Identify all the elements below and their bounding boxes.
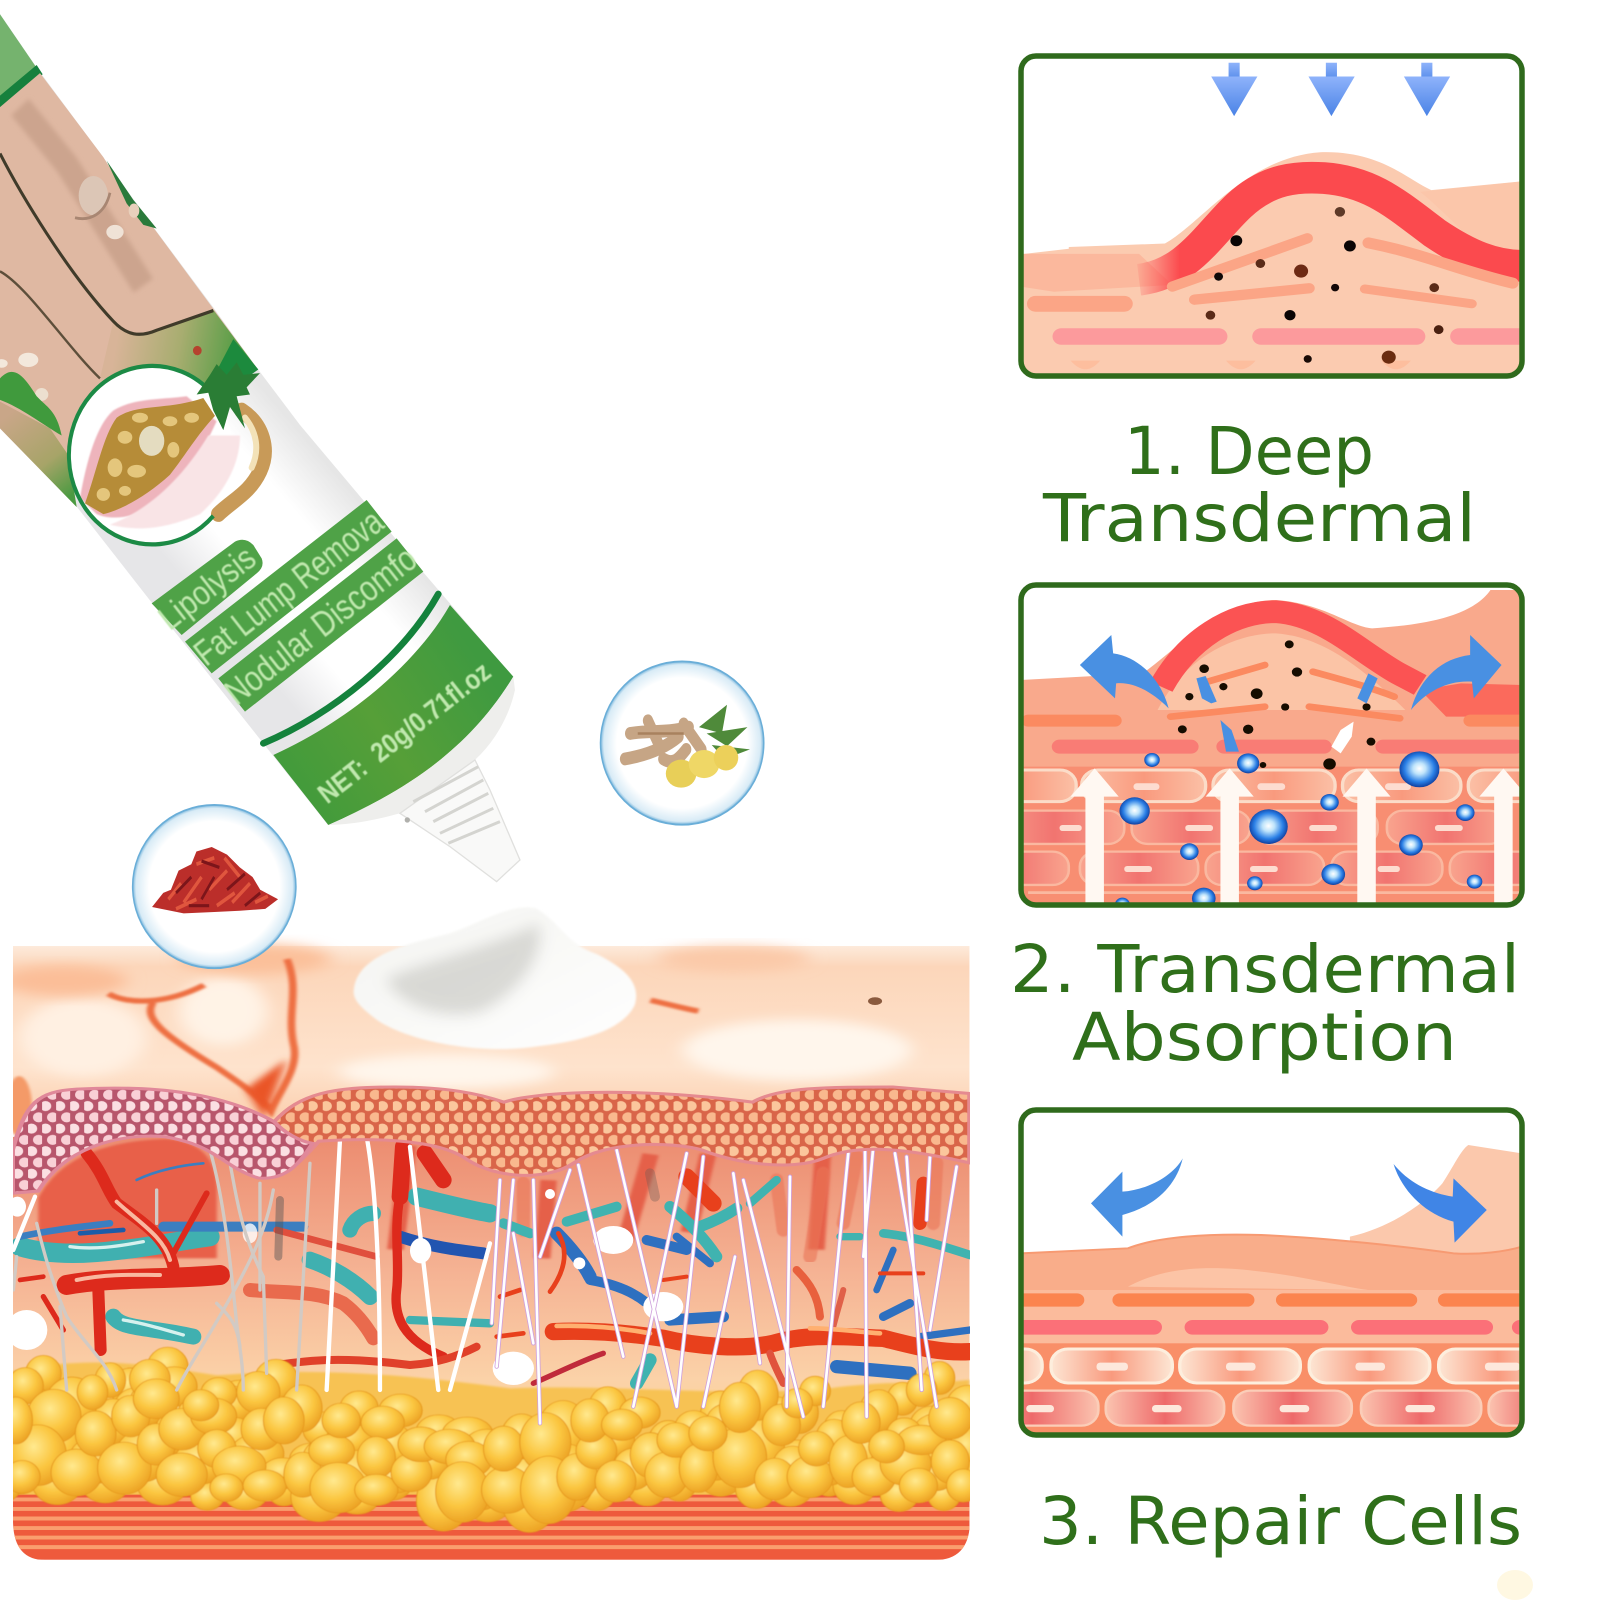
fat layer — [0, 1347, 998, 1560]
ingredient circle — [69, 362, 265, 544]
herb leaves — [197, 362, 260, 430]
fat cells — [0, 1347, 998, 1532]
fibers right — [492, 1147, 957, 1423]
caption 1 — [1042, 413, 1476, 557]
pink bars — [1017, 1305, 1527, 1349]
dermis background — [13, 1136, 970, 1392]
blue absorption spheres — [1115, 751, 1482, 911]
pink bars — [1052, 328, 1520, 345]
white deposits — [493, 1189, 683, 1385]
nozzle — [400, 760, 520, 882]
label: Lipolysis: Lipolysis — [151, 539, 263, 638]
orange bars — [1035, 238, 1513, 304]
cream blob — [354, 907, 636, 1049]
caption line: 1. Deep: 1. Deep — [1124, 413, 1374, 490]
root mass — [85, 398, 215, 514]
fibers left — [13, 1137, 490, 1390]
label: net weight: NET: 20g/0.71fl.oz — [312, 656, 496, 809]
saffron pile — [152, 847, 278, 913]
blue arrow right — [1394, 1164, 1487, 1243]
ginger — [625, 705, 750, 788]
impurity dots — [1206, 207, 1443, 364]
label artwork top — [0, 14, 265, 544]
band: Nodular — [218, 538, 423, 712]
blood vessels left — [20, 1147, 490, 1365]
band: Lipolysis — [152, 540, 263, 635]
faint corner smudge — [1497, 1570, 1533, 1600]
label: Fat Lump Remova: Fat Lump Remova — [186, 500, 391, 673]
skin base — [1024, 590, 1520, 767]
impurity dots — [1178, 640, 1375, 770]
cell rows — [943, 1349, 1585, 1426]
panel: skin cross-section — [0, 944, 998, 1560]
muscle stripes — [13, 1499, 969, 1547]
muscle area — [1021, 767, 1522, 905]
skin bars — [1028, 665, 1520, 721]
green stripe — [263, 594, 438, 743]
label: Nodular Discomfo: Nodular Discomfo — [216, 538, 424, 713]
skin illustration — [0, 73, 258, 507]
light green corner — [0, 14, 37, 104]
panel 2: transdermal absorption — [1024, 590, 1520, 902]
nuclei — [1060, 783, 1463, 872]
blue arrows down — [1211, 63, 1450, 116]
tube label bands — [152, 500, 520, 882]
epidermis cell band — [13, 1087, 969, 1193]
tube body — [0, 14, 513, 825]
band: Fat Lump — [185, 500, 392, 673]
raised skin right — [1350, 1145, 1522, 1257]
cell rows — [1024, 768, 1520, 894]
white arrows up — [1071, 768, 1527, 905]
panel 3: repair cells — [943, 1110, 1585, 1435]
pale stripes upper dermis — [395, 1146, 823, 1258]
white deposits left — [6, 1197, 431, 1350]
cell band background — [1021, 1343, 1522, 1435]
caption line: 2. Transdermal: 2. Transdermal — [1010, 931, 1520, 1008]
blue arrow left — [1091, 1158, 1183, 1237]
nuclei — [1026, 1363, 1520, 1412]
skin base — [1021, 1235, 1522, 1435]
pink bars — [1052, 740, 1520, 754]
ginger bubble — [601, 661, 764, 825]
dark green strip — [0, 65, 43, 111]
caption line: Absorption: Absorption — [1072, 999, 1457, 1076]
shoulder — [328, 677, 515, 825]
small arrows — [1196, 673, 1378, 753]
tube label text — [151, 500, 496, 809]
skin surface — [0, 944, 969, 1137]
saffron bubble — [133, 805, 296, 968]
panel 2 frame — [1021, 585, 1522, 905]
vessel highlights — [77, 1202, 170, 1280]
root tail — [218, 411, 265, 514]
product tube — [0, 14, 764, 968]
caption 2 — [1010, 931, 1520, 1076]
caption line: Transdermal: Transdermal — [1042, 480, 1476, 557]
red layer — [1139, 178, 1524, 280]
panel 1 frame — [1021, 56, 1522, 376]
red layer — [1161, 612, 1420, 687]
orange bars — [1017, 1280, 1527, 1320]
skin base — [1021, 152, 1520, 376]
caption 3: 3. Repair Cells — [1039, 1483, 1522, 1560]
green base band — [273, 605, 513, 825]
root halo — [80, 396, 217, 518]
lower bumps — [1071, 361, 1411, 369]
panel 1: deep transdermal — [1021, 56, 1527, 376]
large blue side arrows — [1080, 635, 1502, 710]
panel 3 frame — [1021, 1110, 1522, 1435]
blood vessels right — [493, 1157, 970, 1385]
